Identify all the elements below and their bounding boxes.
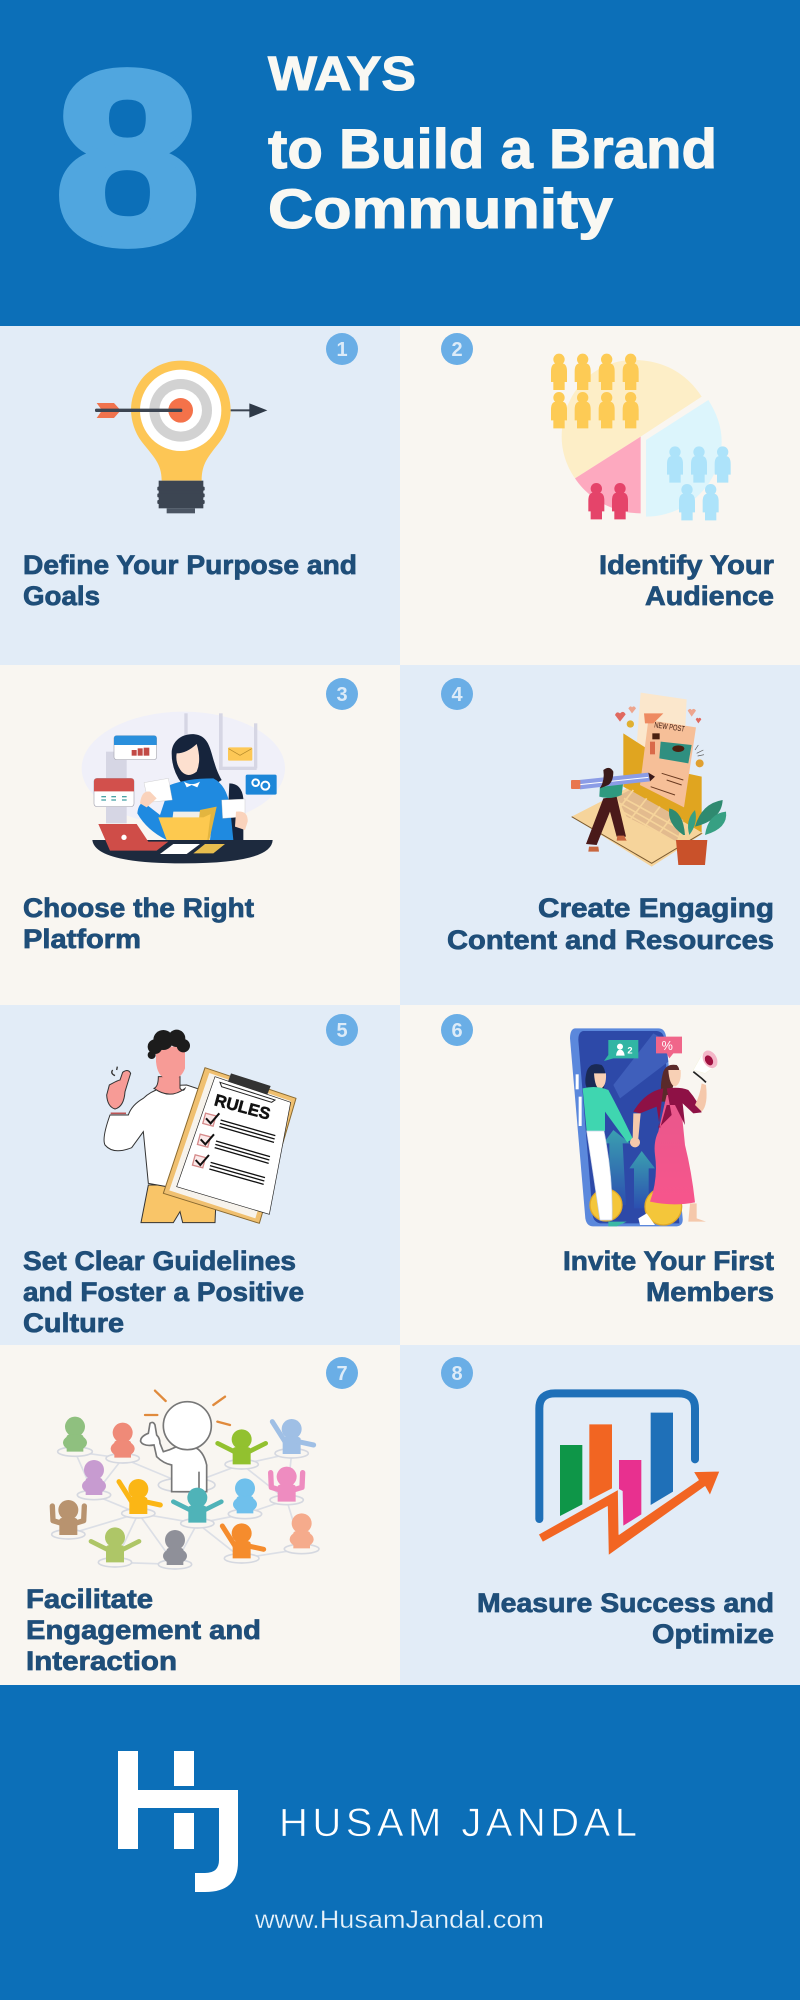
panel 2: identify audience xyxy=(400,326,800,665)
icon: bar chart with arrow xyxy=(538,1393,720,1556)
heading 6: Invite Your First xyxy=(563,1246,774,1276)
panel 5: set guidelines xyxy=(0,1005,400,1345)
title: to Build a Brand xyxy=(268,117,717,180)
badge 2 xyxy=(441,333,473,365)
heading 8: Measure Success and xyxy=(477,1588,774,1618)
icon: light bulb target xyxy=(95,361,267,513)
panel 3: choose platform xyxy=(0,665,400,1005)
heading 6: Members xyxy=(646,1277,774,1307)
badge 4: 4 xyxy=(451,684,463,706)
big number 8: 8 xyxy=(56,22,199,294)
heading 7 xyxy=(26,1584,261,1676)
panel 7: facilitate engagement xyxy=(0,1345,400,1685)
badge 8: 8 xyxy=(451,1363,463,1385)
heading 4 xyxy=(447,893,774,955)
panel 4: create content xyxy=(400,665,800,1005)
badge 1: 1 xyxy=(336,339,348,361)
heading 2: Audience xyxy=(645,581,774,611)
figure: central person xyxy=(141,1402,211,1492)
heading 5: Culture xyxy=(23,1308,124,1338)
heading 2 xyxy=(599,550,775,611)
icon: phone with two women: 2 xyxy=(627,1046,633,1056)
heading 3 xyxy=(23,893,254,954)
brand name: HUSAM JANDAL xyxy=(279,1801,637,1845)
icon: man with rules clipboard: RULES xyxy=(212,1091,273,1124)
footer xyxy=(0,1685,800,2000)
icon: laptop with new post: NEW POST xyxy=(654,720,685,734)
badge 5: 5 xyxy=(336,1020,348,1042)
heading 5: and Foster a Positive xyxy=(23,1277,304,1307)
heading 8: Optimize xyxy=(652,1619,774,1649)
heading 1: Goals xyxy=(23,581,100,611)
heading 7: Engagement and xyxy=(26,1615,261,1645)
heading 5: Set Clear Guidelines xyxy=(23,1246,296,1276)
panel 6: invite members xyxy=(400,1005,800,1345)
badge 8 xyxy=(441,1357,473,1389)
badge 7 xyxy=(326,1357,358,1389)
title: WAYS xyxy=(268,48,416,101)
heading 7: Interaction xyxy=(26,1646,177,1676)
badge 3 xyxy=(326,678,358,710)
heading 1: Define Your Purpose and xyxy=(23,550,357,580)
heading 3: Choose the Right xyxy=(23,893,254,923)
logo mark HJ xyxy=(118,1751,238,1892)
heading 1 xyxy=(23,550,357,611)
icon: woman at desk xyxy=(82,712,285,863)
heading 8 xyxy=(477,1588,774,1649)
icon: community network xyxy=(52,1391,319,1569)
heading 3: Platform xyxy=(23,924,141,954)
badge 5 xyxy=(326,1014,358,1046)
header banner xyxy=(0,0,800,326)
icon: laptop with new post xyxy=(571,693,726,867)
heading 7: Facilitate xyxy=(26,1584,153,1614)
heading 6 xyxy=(563,1246,774,1307)
heading 2: Identify Your xyxy=(599,550,775,580)
badge 7: 7 xyxy=(336,1363,348,1385)
badge 6: 6 xyxy=(451,1020,463,1042)
panel 1: define purpose xyxy=(0,326,400,665)
panel 8: measure success xyxy=(400,1345,800,1685)
icon: phone with two women: % xyxy=(662,1039,673,1053)
website: www.HusamJandal.com xyxy=(254,1906,544,1934)
badge 6 xyxy=(441,1014,473,1046)
badge 1 xyxy=(326,333,358,365)
title xyxy=(268,48,717,240)
badge 4 xyxy=(441,678,473,710)
badge 2: 2 xyxy=(451,339,463,361)
heading 4: Create Engaging xyxy=(538,893,774,923)
title: Community xyxy=(268,177,613,240)
icon: pie chart with people xyxy=(551,354,731,520)
heading 5 xyxy=(23,1246,304,1338)
icon: man with rules clipboard xyxy=(104,1030,296,1223)
heading 4: Content and Resources xyxy=(447,925,774,955)
icon: phone with two women xyxy=(570,1028,720,1226)
badge 3: 3 xyxy=(336,684,348,706)
